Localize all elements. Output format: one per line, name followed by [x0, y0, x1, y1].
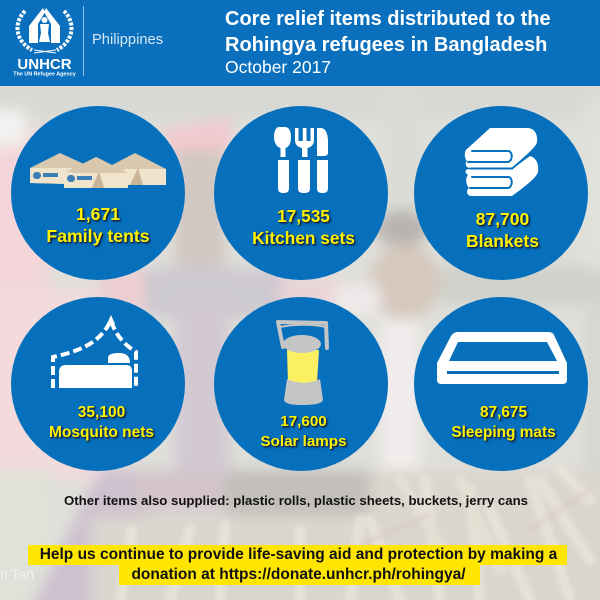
divider — [83, 6, 84, 76]
panel: kitchen sets — [214, 106, 388, 280]
label: 87,700 Blankets: 87,700 — [476, 209, 529, 229]
label: 17,535 Kitchen sets — [252, 206, 357, 248]
label: 35,100 Mosquito nets: 35,100 — [78, 404, 125, 421]
title: Core relief items distributed to the — [225, 8, 551, 30]
note: other items: Other items also supplied: plastic rolls, plastic sheets, buckets, jerry cans — [64, 493, 528, 508]
label: 1,671 Family tents — [46, 204, 152, 248]
label: 17,600 Solar lamps — [260, 413, 349, 452]
UNHCR logo — [13, 8, 76, 78]
panel: blankets — [414, 106, 588, 280]
photo credit: n Tan — [0, 566, 34, 582]
UNHCR logo: UNHCR — [17, 56, 72, 73]
panel: mosquito nets — [11, 297, 185, 471]
header bar — [0, 0, 600, 86]
label: 87,675 Sleeping mats: 87,675 — [480, 404, 527, 421]
label: 87,700 Blankets — [466, 209, 541, 251]
label: 17,535 Kitchen sets: 17,535 — [277, 206, 330, 226]
panel: solar lamps — [214, 297, 388, 471]
icon: cutlery — [274, 127, 328, 193]
label: 17,600 Solar lamps: Solar lamps — [260, 433, 347, 450]
label: 87,675 Sleeping mats: Sleeping mats — [451, 424, 556, 441]
panel: sleeping mats — [414, 297, 588, 471]
Philippines label: Philippines — [92, 32, 163, 48]
UNHCR logo: The UN Refugee Agency — [13, 72, 76, 78]
icon: lantern — [276, 320, 329, 405]
label: 87,700 Blankets: Blankets — [466, 231, 539, 251]
icon: folded blankets — [464, 128, 538, 196]
title — [225, 8, 551, 77]
label: 1,671 Family tents: 1,671 — [76, 204, 120, 224]
label: 17,600 Solar lamps: 17,600 — [280, 413, 327, 430]
title: October 2017 — [225, 57, 331, 77]
label: 1,671 Family tents: Family tents — [46, 226, 150, 246]
label: 87,675 Sleeping mats — [451, 404, 558, 444]
callout: donation appeal — [28, 545, 567, 585]
icon: mat — [437, 332, 567, 384]
title: Rohingya refugees in Bangladesh — [225, 34, 547, 56]
label: 35,100 Mosquito nets — [49, 404, 156, 444]
callout: donation appeal: Help us continue to provide life-saving aid and protection by making a — [40, 546, 557, 563]
icon: tents — [30, 153, 166, 188]
callout: donation appeal: donation at https://donate.unhcr.ph/rohingya/ — [131, 566, 466, 582]
label: 17,535 Kitchen sets: Kitchen sets — [252, 228, 355, 248]
label: 35,100 Mosquito nets: Mosquito nets — [49, 424, 154, 441]
icon: bed under net — [51, 315, 138, 388]
panel: family tents — [11, 106, 185, 280]
